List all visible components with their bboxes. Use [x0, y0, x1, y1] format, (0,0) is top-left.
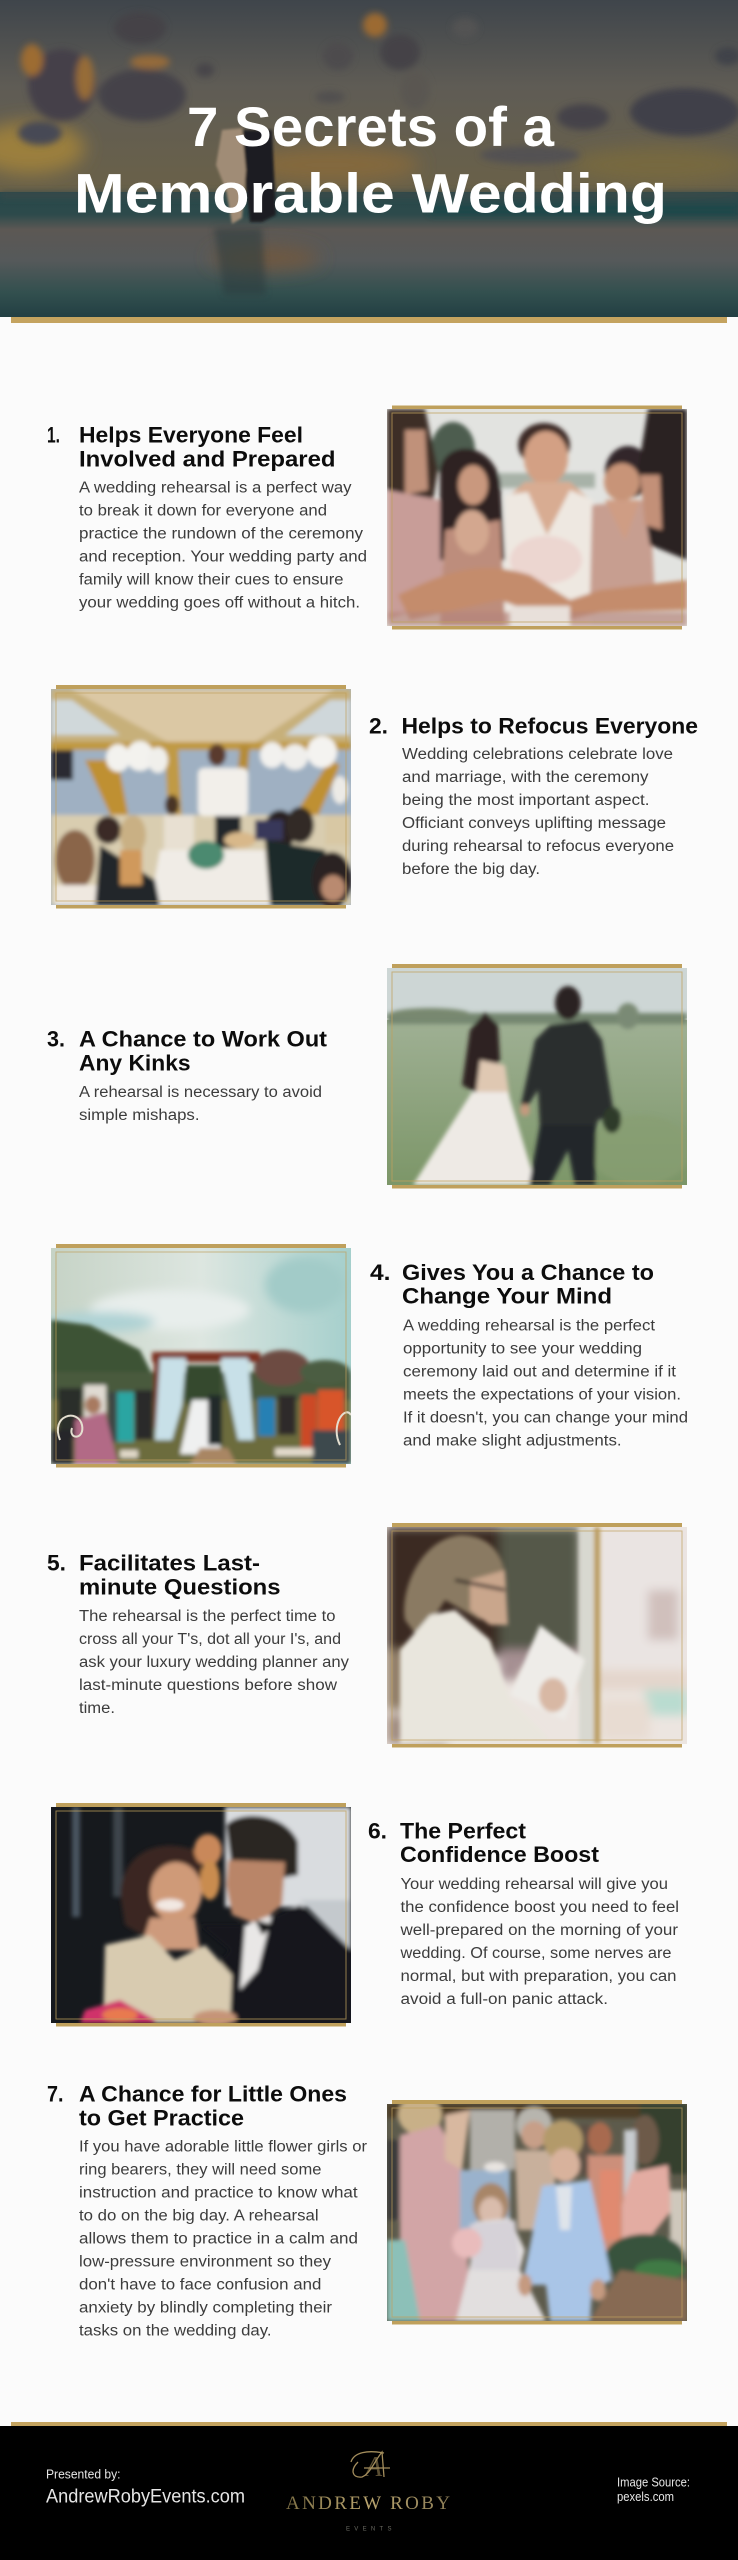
photo 7: flower girl and ring bearer	[387, 2095, 687, 2324]
body text 6: Your wedding rehearsal will give you	[400, 1876, 668, 1893]
body text 3: A rehearsal is necessary to avoid	[79, 1084, 322, 1101]
section 6: the perfect confidence boost	[51, 1803, 679, 2026]
presented by credit: AndrewRobyEvents.com	[46, 2486, 245, 2508]
heading 7: to Get Practice	[79, 2106, 244, 2130]
heading 6	[400, 1818, 600, 1867]
body text 1: practice the rundown of the ceremony	[79, 526, 363, 542]
title: 7 Secrets of a	[187, 95, 555, 158]
heading 3: Any Kinks	[79, 1050, 191, 1076]
number 5: 5.	[47, 1550, 66, 1576]
body text 4: A wedding rehearsal is the perfect	[403, 1318, 656, 1334]
heading 5	[79, 1550, 280, 1600]
body text 7: low-pressure environment so they	[79, 2254, 331, 2270]
body text 1: family will know their cues to ensure	[79, 572, 344, 588]
body text 1: and reception. Your wedding party and	[79, 548, 367, 566]
body text 7: ring bearers, they will need some	[79, 2162, 321, 2178]
body text 4: and make slight adjustments.	[403, 1432, 622, 1450]
section 7: a chance for little ones to get practice	[47, 2082, 687, 2340]
title	[74, 95, 667, 224]
number 4: 4.	[370, 1260, 390, 1285]
body text 7: to do on the big day. A rehearsal	[79, 2208, 319, 2224]
body text 7: If you have adorable little flower girls or	[79, 2138, 367, 2156]
body text 1: A wedding rehearsal is a perfect way	[79, 480, 352, 496]
number 2: 2.	[369, 714, 388, 738]
section 5: facilitates last-minute questions	[47, 1523, 687, 1748]
body text 7: instruction and practice to know what	[79, 2184, 358, 2202]
heading 5: minute Questions	[79, 1574, 280, 1600]
photo 3: couple in a green field	[387, 964, 690, 1188]
body text 3: simple mishaps.	[79, 1107, 200, 1124]
body text 7: anxiety by blindly completing their	[79, 2300, 332, 2316]
body text 2: Officiant conveys uplifting message	[402, 815, 666, 832]
photo 4: outdoor ceremony under an arch	[45, 1244, 351, 1468]
number 6: 6.	[368, 1818, 387, 1844]
hero gold rule	[11, 317, 727, 323]
heading 5: Facilitates Last-	[79, 1550, 260, 1576]
heading 4	[402, 1260, 654, 1308]
body text 4	[403, 1318, 688, 1450]
body text 7: don't have to face confusion and	[79, 2276, 321, 2294]
title: Memorable Wedding	[74, 162, 667, 224]
image source credit: Image Source:	[617, 2476, 690, 2490]
body text 2	[402, 746, 674, 878]
number 7: 7.	[47, 2082, 64, 2106]
body text 5: time.	[79, 1700, 115, 1717]
body text 5: ask your luxury wedding planner any	[79, 1654, 349, 1671]
section 3: a chance to work out any kinks	[47, 964, 690, 1188]
photo 6: bride and groom portrait	[51, 1803, 351, 2026]
body text 3	[79, 1084, 322, 1124]
body text 2: during rehearsal to refocus everyone	[402, 838, 674, 855]
body text 5: cross all your T's, dot all your I's, and	[79, 1631, 341, 1648]
body text 1: to break it down for everyone and	[79, 502, 327, 520]
body text 5	[79, 1608, 349, 1717]
heading 6: The Perfect	[400, 1818, 527, 1844]
photo 2: yacht reception toast	[51, 685, 352, 908]
heading 1: Helps Everyone Feel	[79, 422, 303, 448]
body text 6	[399, 1876, 679, 2008]
logo: andrew roby events: ANDREW ROBY	[286, 2493, 450, 2514]
heading 7: A Chance for Little Ones	[79, 2082, 347, 2106]
presented by credit: Presented by:	[46, 2468, 120, 2482]
heading 3: A Chance to Work Out	[79, 1026, 328, 1052]
body text 6: the confidence boost you need to feel	[400, 1899, 679, 1916]
heading 4: Change Your Mind	[402, 1284, 612, 1308]
heading 1: Involved and Prepared	[79, 446, 336, 472]
photo 1: bride and bridesmaids	[387, 406, 687, 630]
footer gold rule	[11, 2422, 727, 2427]
body text 6: wedding. Of course, some nerves are	[399, 1945, 672, 1962]
image source credit: pexels.com	[617, 2490, 674, 2504]
body text 6: avoid a full-on panic attack.	[400, 1991, 608, 2008]
body text 2: Wedding celebrations celebrate love	[402, 746, 673, 763]
heading 3	[79, 1026, 328, 1076]
heading 6: Confidence Boost	[400, 1842, 600, 1867]
body text 2: and marriage, with the ceremony	[402, 769, 649, 786]
body text 1: your wedding goes off without a hitch.	[79, 594, 360, 612]
heading 7	[79, 2082, 347, 2130]
number 3: 3.	[47, 1026, 65, 1052]
body text 7: tasks on the wedding day.	[79, 2322, 272, 2340]
body text 5: The rehearsal is the perfect time to	[79, 1608, 336, 1625]
body text 4: If it doesn't, you can change your mind	[403, 1410, 688, 1426]
section 2: helps to refocus everyone	[51, 685, 698, 908]
presented by credit	[46, 2468, 245, 2508]
footer panel	[0, 2426, 738, 2560]
section 1: helps everyone feel involved	[47, 406, 687, 630]
heading 2: Helps to Refocus Everyone	[402, 714, 698, 738]
section 4: gives you a chance to change your mind	[45, 1244, 688, 1468]
body text 6: well-prepared on the morning of your	[399, 1922, 678, 1939]
body text 7: allows them to practice in a calm and	[79, 2230, 358, 2248]
body text 4: opportunity to see your wedding	[403, 1340, 642, 1358]
body text 4: ceremony laid out and determine if it	[403, 1364, 677, 1380]
body text 4: meets the expectations of your vision.	[403, 1386, 681, 1404]
body text 7	[79, 2138, 367, 2340]
body text 5: last-minute questions before show	[79, 1677, 338, 1694]
heading 1	[79, 422, 336, 472]
hero banner photo: couple on beach at sunset	[0, 0, 738, 317]
body text 2: before the big day.	[402, 861, 540, 878]
heading 4: Gives You a Chance to	[402, 1260, 654, 1285]
logo: andrew roby events: A	[363, 2452, 383, 2483]
photo 5: wedding planner reading notes	[387, 1523, 687, 1748]
body text 6: normal, but with preparation, you can	[400, 1968, 676, 1985]
body text 2: being the most important aspect.	[402, 792, 650, 809]
logo: andrew roby events	[286, 2452, 450, 2532]
image source credit	[617, 2476, 690, 2504]
logo: andrew roby events: EVENTS	[346, 2526, 392, 2532]
body text 1	[79, 480, 367, 612]
number 1: 1.	[47, 422, 60, 448]
